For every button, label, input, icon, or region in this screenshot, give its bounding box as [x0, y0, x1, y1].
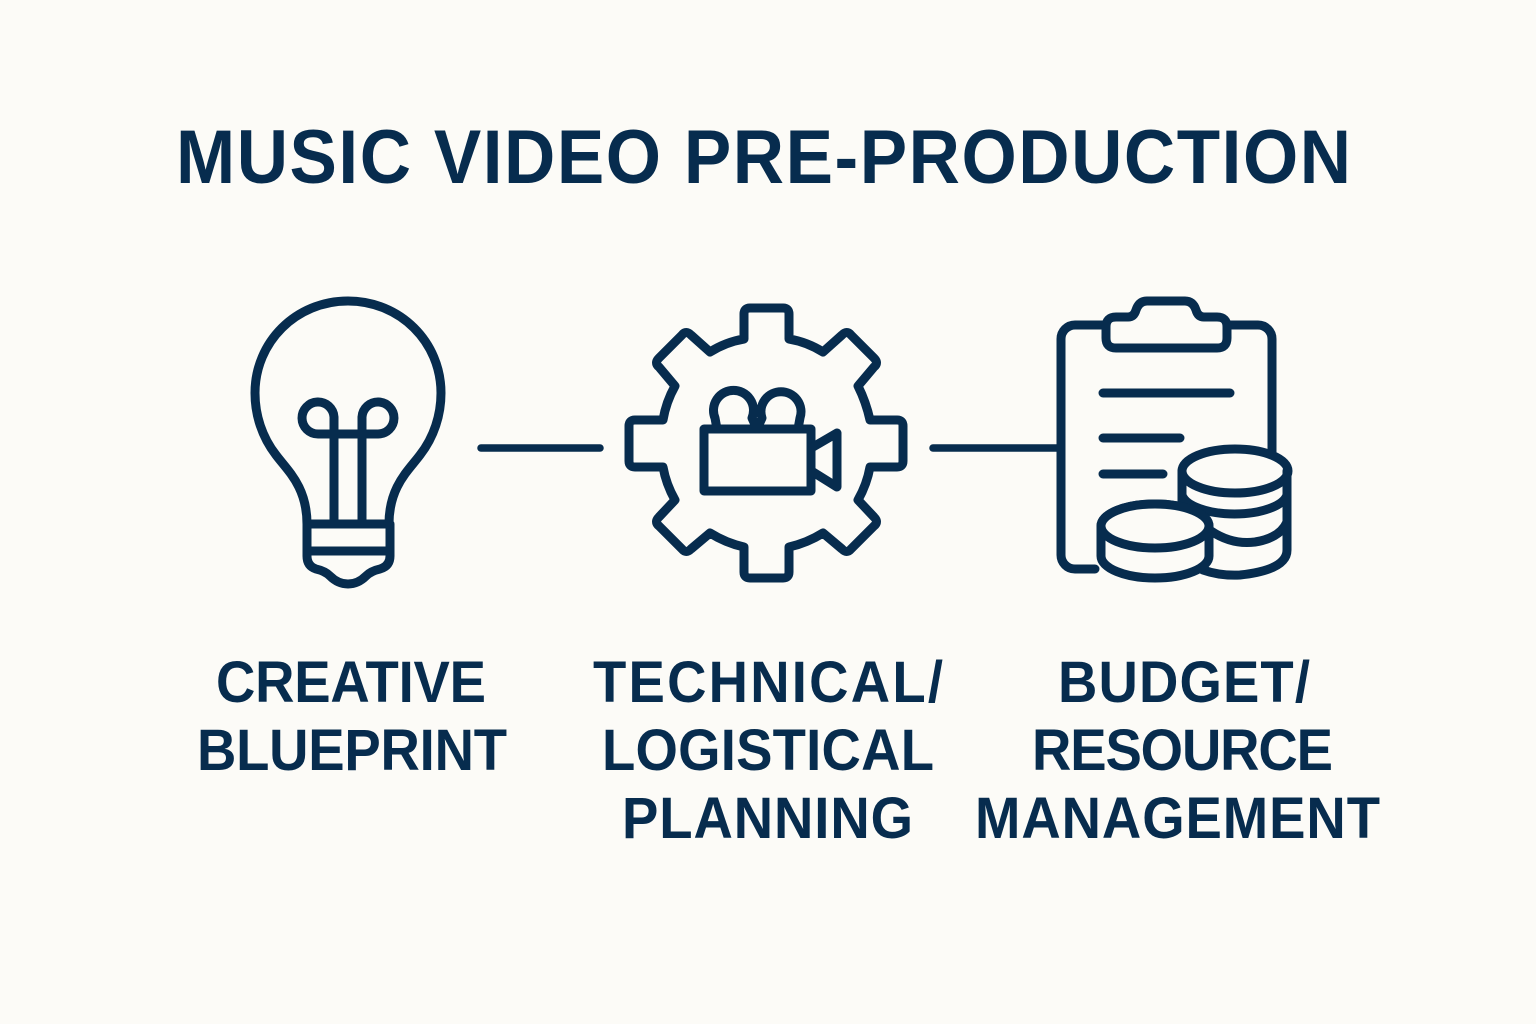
clipboard board [1061, 325, 1272, 569]
checklist lines [1103, 393, 1230, 474]
title: MUSIC VIDEO PRE-PRODUCTION [176, 114, 1351, 200]
icon: gear with video camera [629, 308, 903, 578]
label: creative blueprint: CREATIVE [216, 649, 486, 714]
connector: bulb to gear [481, 444, 600, 452]
camera lens [813, 433, 837, 487]
gear outline [629, 308, 903, 578]
upper coin stack [1182, 449, 1288, 575]
icon: light bulb [255, 301, 441, 584]
label: budget resource management: MANAGEMENT [975, 785, 1380, 850]
icon: clipboard with coins [1061, 301, 1288, 578]
label: creative blueprint: BLUEPRINT [197, 717, 507, 782]
lower coin stack [1101, 504, 1209, 578]
label: budget resource management: RESOURCE [1032, 717, 1333, 782]
label: technical logistical planning [593, 649, 943, 850]
bulb screw base [307, 524, 390, 584]
label: budget resource management: BUDGET/ [1058, 649, 1310, 714]
label: technical logistical planning: LOGISTICAL [602, 717, 934, 782]
bulb glass [255, 301, 441, 524]
label: budget resource management [975, 649, 1380, 850]
clipboard clip [1106, 301, 1227, 348]
camera body [704, 429, 811, 491]
camera film reels [714, 390, 801, 429]
label: technical logistical planning: TECHNICAL/ [593, 649, 943, 714]
connector: gear to clipboard [933, 444, 1058, 452]
filament [302, 402, 394, 524]
label: creative blueprint [197, 649, 507, 782]
label: technical logistical planning: PLANNING [622, 785, 913, 850]
